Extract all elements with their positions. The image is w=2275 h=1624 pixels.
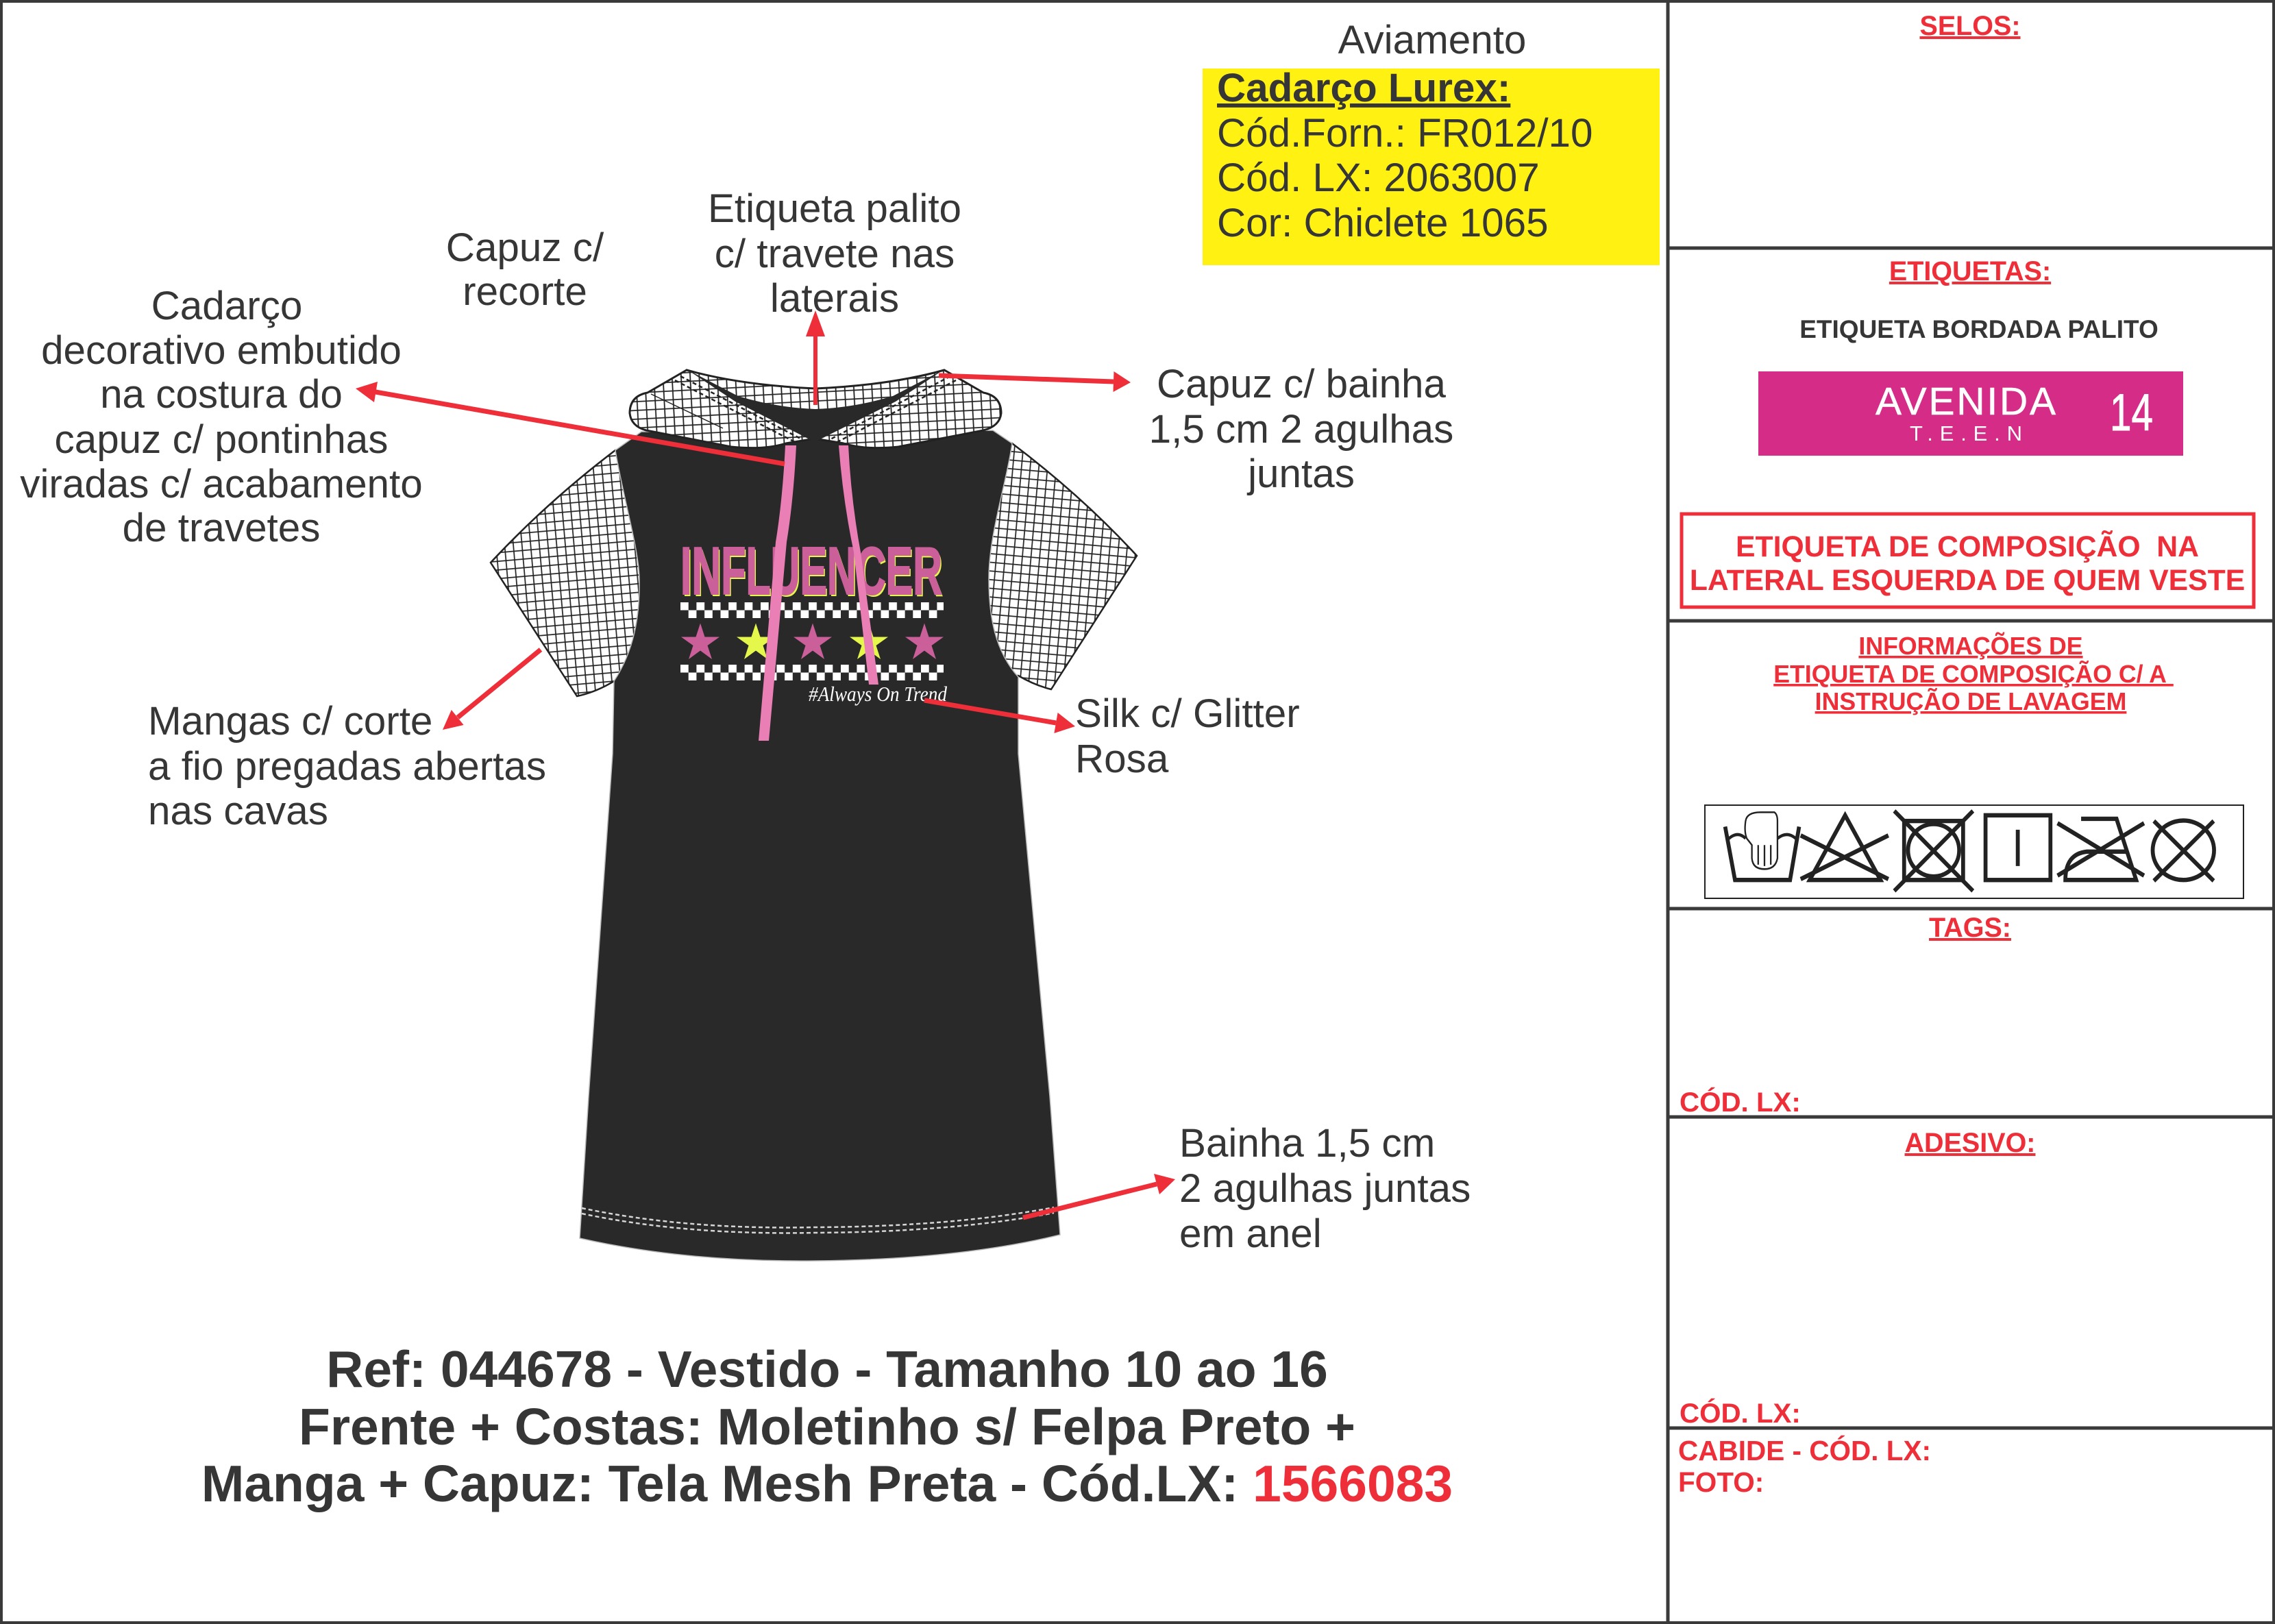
label: bainha: 2 agulhas juntas [1179,1166,1471,1211]
right mesh sleeve [973,443,1137,689]
callout: trim details: Cor: Chiclete 1065 [1217,201,1549,245]
drawstring left [759,445,796,741]
etiquetas heading: ETIQUETAS: [1889,256,2051,286]
panel: tags: TAGS: [1929,913,2011,943]
icon: no iron [2058,819,2144,880]
neck opening [687,369,944,440]
callout: trim details: Cód. LX: 2063007 [1217,156,1540,200]
title block: Manga + Capuz: Tela Mesh Preta - Cód.LX: 1566083 [201,1455,1453,1512]
dress body [580,430,1060,1261]
label: capuz recorte [446,225,604,314]
icon: no tumble dry [1894,811,1973,891]
title block: Frente + Costas: Moletinho s/ Felpa Preto + [299,1398,1355,1455]
label: cadarco decorativo: decorativo embutido [41,328,402,373]
arrow: capuz bainha [939,371,1131,392]
hem stitching [582,1207,1054,1233]
print: stars [681,624,944,659]
garment: hooded dress [491,369,1137,1261]
label: cadarco decorativo: capuz c/ pontinhas [55,417,388,462]
brand label: 14 [2110,384,2153,442]
title block [201,1340,1453,1512]
label: capuz bainha: 1,5 cm 2 agulhas [1149,407,1453,452]
callout: trim details: Cód.Forn.: FR012/10 [1217,111,1592,156]
panel: adesivo: ADESIVO: [1905,1128,2035,1158]
arrow: palito label [806,310,825,405]
label: mangas: Mangas c/ corte [148,699,432,743]
label: mangas [148,699,546,833]
panel: cabide: FOTO: [1678,1466,1764,1498]
composition label notice: ETIQUETA DE COMPOSIÇÃO NA [1736,530,2199,563]
arrow: mangas [443,650,541,730]
composition label notice: LATERAL ESQUERDA DE QUEM VESTE [1690,564,2245,597]
label: silk glitter [1075,691,1300,781]
icon: no bleach [1801,815,1889,880]
aviamento heading: Aviamento [1338,18,1526,62]
panel: composition info heading: INSTRUÇÃO DE LAVAGEM [1815,688,2126,715]
panel: tags [1680,913,2011,1118]
label: capuz bainha: juntas [1246,452,1355,496]
label: bainha [1179,1121,1471,1256]
label: capuz recorte: Capuz c/ [446,225,604,270]
label: capuz bainha: Capuz c/ bainha [1157,362,1447,406]
panel: adesivo: CÓD. LX: [1680,1397,1801,1429]
callout: trim details: Cadarço Lurex: [1217,66,1510,110]
arrow: cadarco [356,382,785,464]
print: checker band bottom [680,665,944,680]
etiqueta bordada heading: ETIQUETA BORDADA PALITO [1799,315,2159,343]
print: INFLUENCER: INFLUENCER [682,535,944,611]
label: etiqueta palito: Etiqueta palito [708,186,961,231]
left mesh sleeve [491,450,658,696]
panel: composition info heading: INFORMAÇÕES DE [1858,632,2083,660]
label: capuz bainha [1149,362,1453,496]
panel: tags: CÓD. LX: [1680,1086,1801,1118]
label: bainha: em anel [1179,1211,1322,1256]
panel: selos heading: SELOS: [1919,11,2021,41]
composition label notice [1682,514,2254,607]
print: INFLUENCER: INFLUENCER [680,533,942,608]
label: etiqueta palito [708,186,961,321]
icon: hand wash [1725,812,1799,880]
label: etiqueta palito: c/ travete nas [715,232,955,276]
brand label [1758,371,2183,456]
label: cadarco decorativo [20,284,423,550]
label: cadarco decorativo: de travetes [123,506,320,550]
label: cadarco decorativo: Cadarço [151,284,302,328]
label: cadarco decorativo: na costura do [100,372,343,417]
label: silk glitter: Rosa [1075,737,1169,781]
label: etiqueta palito: laterais [770,276,899,321]
label: mangas: nas cavas [148,789,328,833]
arrow: silk [924,700,1075,733]
label: mangas: a fio pregadas abertas [148,744,546,789]
arrow: bainha [1023,1174,1175,1218]
icon: no dry clean [2153,820,2214,881]
panel: adesivo [1680,1128,2035,1429]
print: INFLUENCER [680,533,944,611]
brand label: T.E.E.N [1910,421,2022,445]
label: silk glitter: Silk c/ Glitter [1075,691,1300,736]
panel: etiquetas [1682,256,2254,607]
panel: cabide [1678,1435,1931,1498]
wash care symbols [1705,805,2243,898]
brand label: AVENIDA [1876,380,2056,423]
title block: Ref: 044678 - Vestido - Tamanho 10 ao 16 [326,1340,1328,1398]
label: capuz recorte: recorte [463,269,587,314]
panel: composition info heading [1773,632,2174,715]
panel: cabide: CABIDE - CÓD. LX: [1678,1435,1931,1466]
hood [630,369,1001,448]
panel: composition info heading: ETIQUETA DE COMPOSIÇÃO C/ A [1773,661,2174,688]
label: cadarco decorativo: viradas c/ acabamento [20,462,423,506]
icon: line dry [1986,815,2050,880]
label: bainha: Bainha 1,5 cm [1179,1121,1435,1166]
drawstring right [839,445,878,685]
print: checker band top [680,602,944,618]
callout: trim details [1203,66,1660,265]
print: slogan: #Always On Trend [809,682,947,706]
